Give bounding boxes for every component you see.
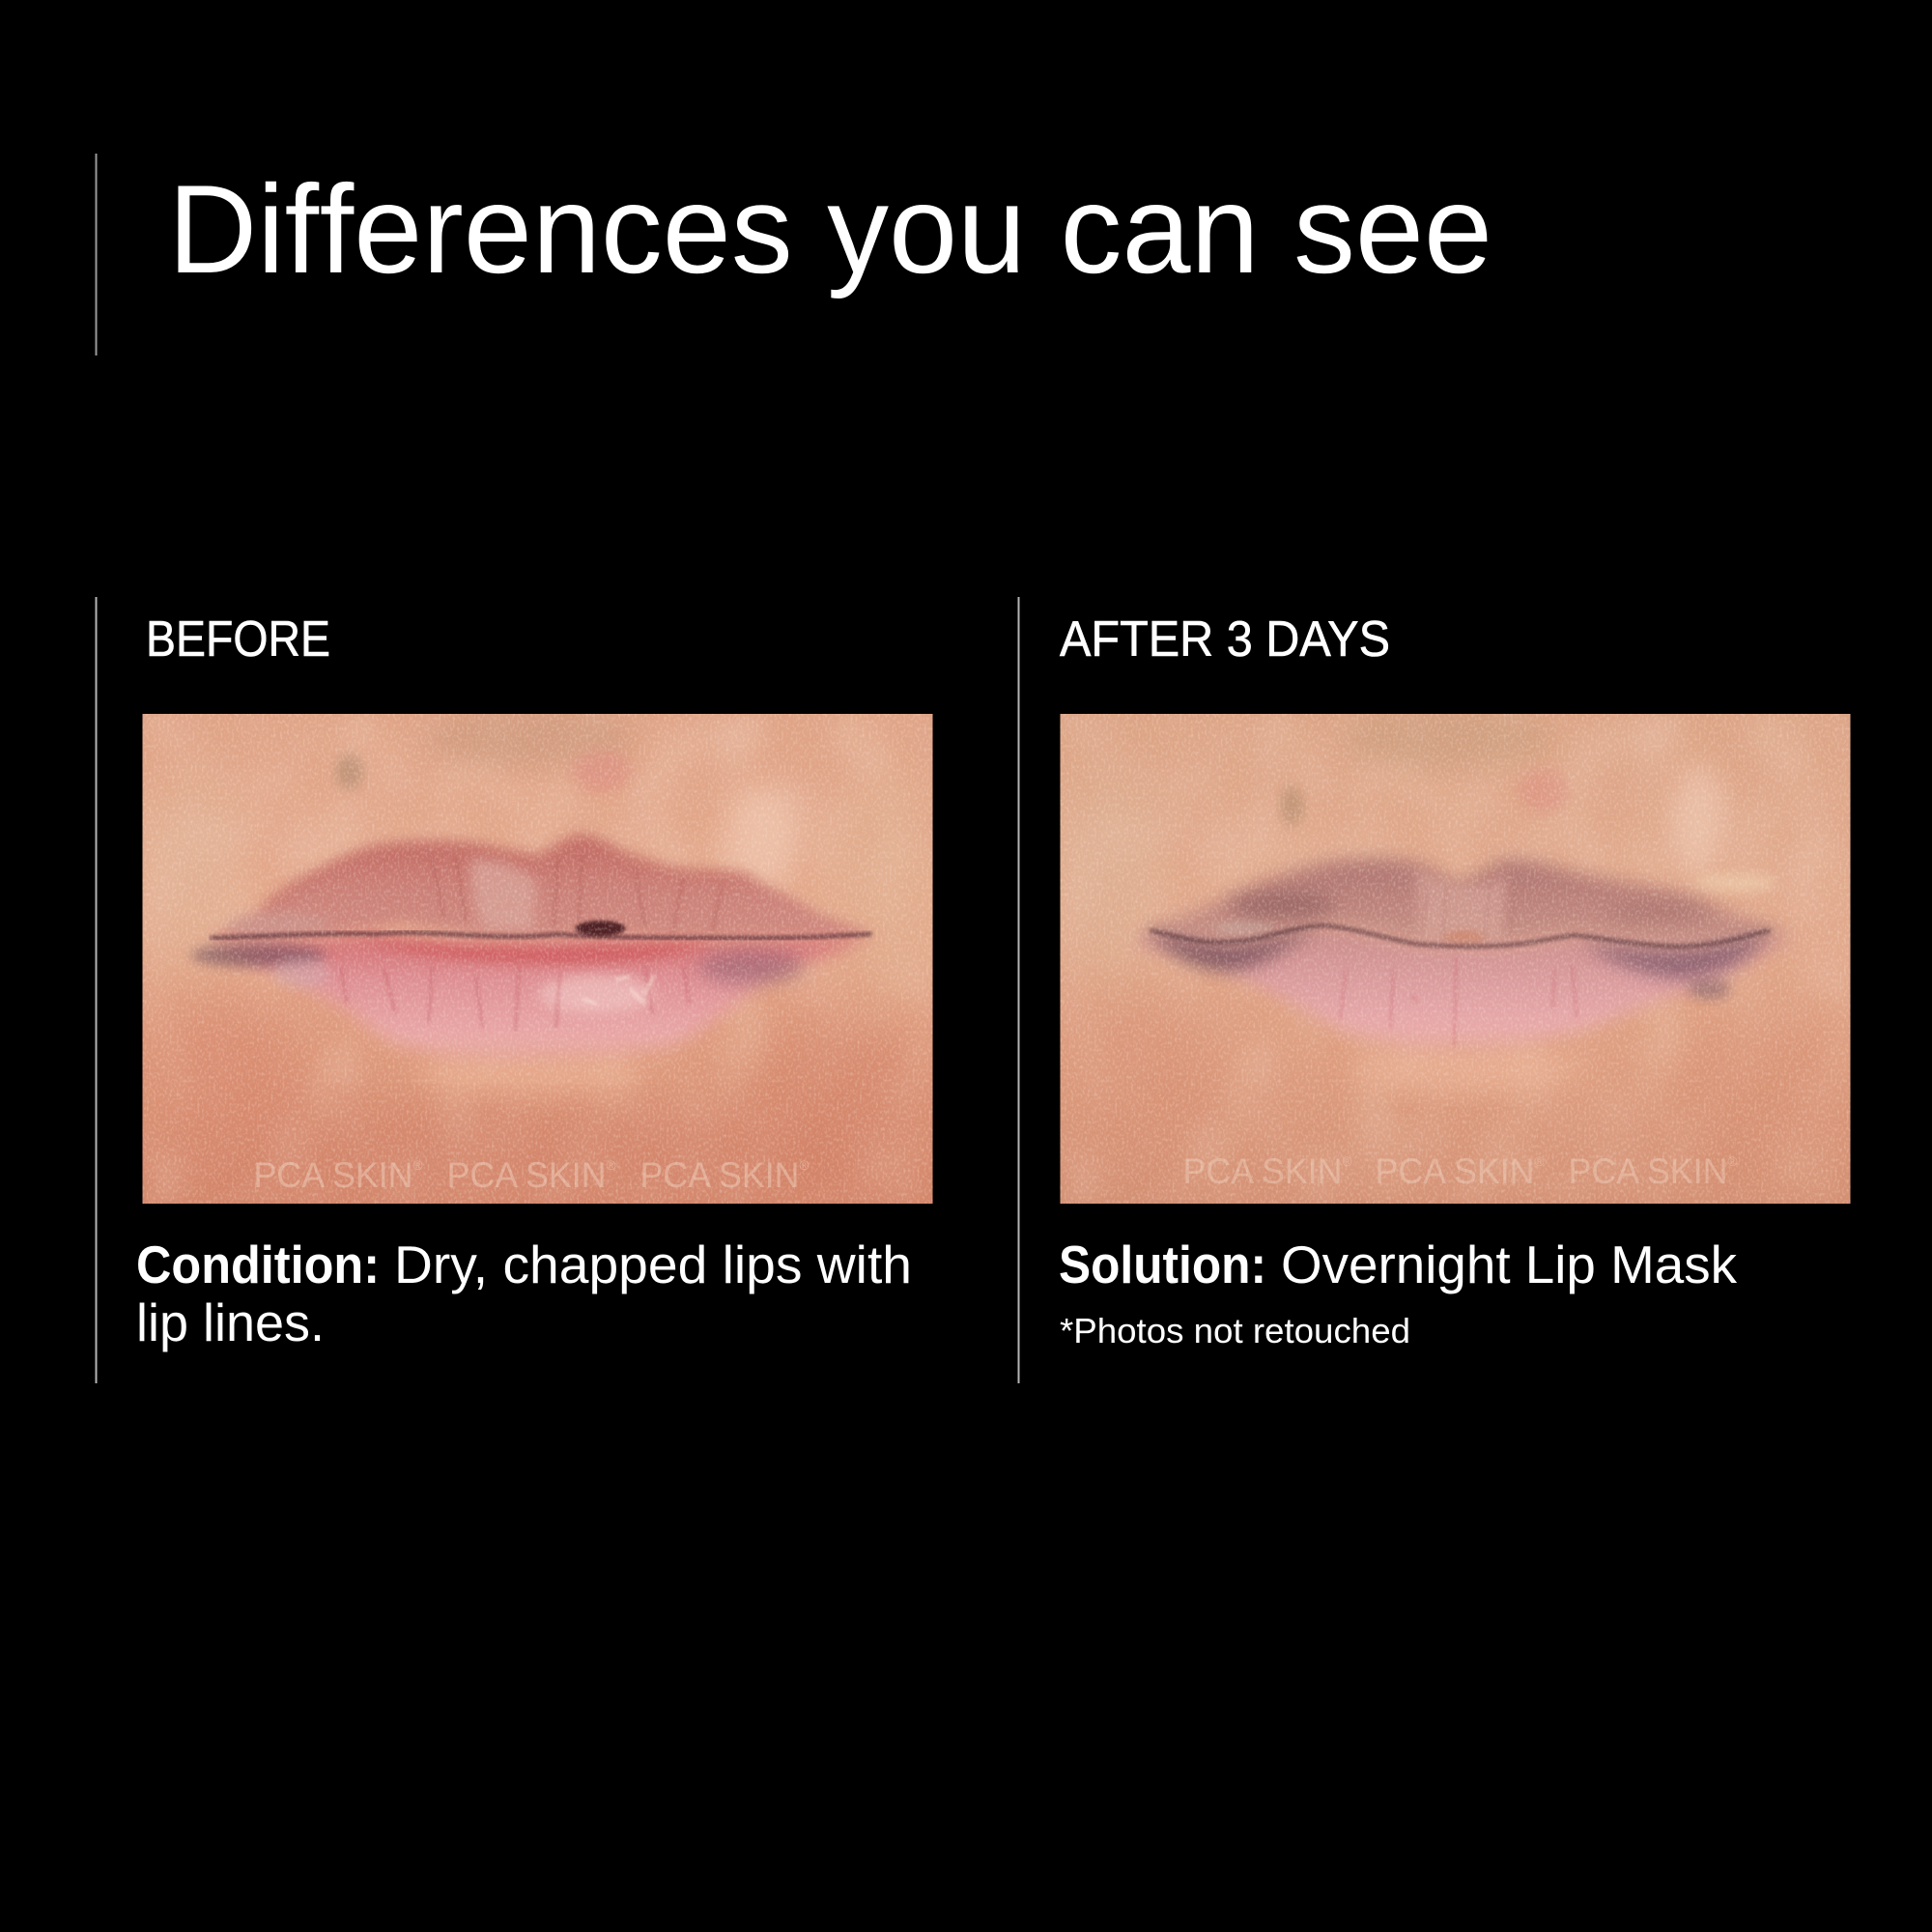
photo: lips before treatment [143,714,933,1204]
heading: before: BEFORE [146,611,330,668]
watermark: ® [1728,1153,1738,1169]
watermark: PCA SKIN [446,1155,611,1195]
watermark [1186,1157,1737,1184]
caption: solution: Overnight Lip Mask [1281,1235,1737,1294]
caption: condition: Condition: [136,1235,380,1294]
heading: after 3 days: AFTER 3 DAYS [1060,611,1390,668]
watermark: ® [1535,1153,1545,1169]
watermark [257,1161,810,1188]
watermark: PCA SKIN [639,1155,805,1195]
caption: condition: Dry, chapped lips with [394,1235,912,1294]
upper lip [1140,859,1797,947]
caption: solution: Solution: [1059,1235,1266,1294]
dark lip shading [1148,924,1325,971]
caption: solution [1059,1235,1737,1294]
watermark: PCA SKIN [1182,1151,1348,1191]
photo: lips after treatment [1061,714,1851,1204]
lower lip [207,934,873,1060]
mouth line [1150,925,1770,947]
watermark: PCA SKIN [253,1155,418,1195]
watermark: PCA SKIN [1376,1151,1540,1191]
watermark: ® [800,1157,810,1173]
panel: after 3 days [1018,597,1853,1383]
watermark: ® [607,1157,616,1173]
lip fissures [1341,955,1577,1047]
title block: Differences you can see [168,158,1492,299]
caption: condition: lip lines. [136,1293,325,1352]
panel: before [95,597,935,1383]
caption: condition [136,1235,912,1352]
lower lip [1140,925,1797,1050]
footnote: *Photos not retouched [1060,1311,1410,1350]
mouth line and gap [211,932,871,938]
watermark: PCA SKIN [1569,1151,1733,1191]
watermark: ® [1343,1153,1352,1169]
upper lip [207,838,873,940]
watermark: ® [413,1157,423,1173]
lip fissures [340,965,690,1033]
